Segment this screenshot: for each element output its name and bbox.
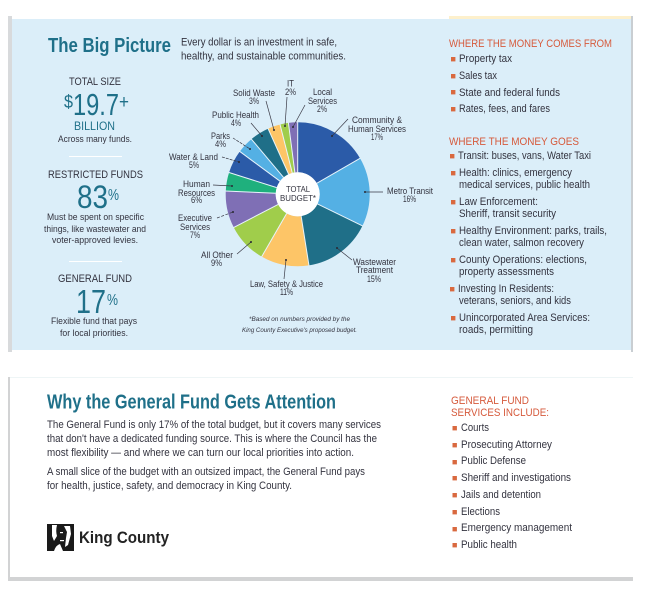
stat: restricted funds: 83 xyxy=(77,179,108,215)
stat: total size xyxy=(58,76,132,145)
panel: the big picture xyxy=(8,16,633,352)
list: where the money goes: Sheriff, transit security xyxy=(459,208,556,220)
list: where the money goes xyxy=(449,136,607,336)
footnote xyxy=(242,316,357,334)
stat: total size: $ xyxy=(64,92,73,112)
pie labels: Services xyxy=(308,96,337,106)
footnote: *Based on numbers provided by the xyxy=(249,316,350,323)
stat: total size: BILLION xyxy=(74,121,115,133)
stat: general fund: % xyxy=(107,292,118,309)
stat: restricted funds: voter-approved levies. xyxy=(52,235,138,246)
list: general fund services: SERVICES INCLUDE: xyxy=(451,407,549,419)
list: where the money comes from xyxy=(449,38,612,115)
pie labels: Resources xyxy=(178,188,215,198)
stat: general fund: 17 xyxy=(76,283,106,320)
heading: the big picture: The Big Picture xyxy=(48,34,171,57)
pie labels: 2% xyxy=(285,87,296,97)
stat: total size: + xyxy=(119,92,129,113)
pie labels: IT xyxy=(287,78,295,88)
list: where the money goes: property assessments xyxy=(459,266,554,278)
pie labels: 2% xyxy=(317,104,327,114)
list: where the money goes: Unincorporated Area Services: xyxy=(459,312,590,324)
pie chart: total budget xyxy=(225,122,364,266)
pie labels: 7% xyxy=(190,230,200,240)
list: where the money goes: County Operations: elections, xyxy=(459,254,587,266)
pie labels: 4% xyxy=(231,118,241,128)
pie labels: Parks xyxy=(211,131,230,141)
list: where the money comes from: Sales tax xyxy=(459,70,497,82)
list: where the money goes: Law Enforcement: xyxy=(459,196,538,208)
body text: most flexibility — and where we can turn our local priorities into action. xyxy=(47,447,354,459)
pie labels: Water & Land xyxy=(169,152,218,162)
pie centre label: TOTAL xyxy=(286,184,310,194)
list: general fund services: Prosecuting Attorney xyxy=(461,439,552,451)
body text: The General Fund is only 17% of the total budget, but it covers many services xyxy=(47,419,381,431)
stat: restricted funds: Must be spent on specific xyxy=(47,212,144,223)
list: where the money goes: Investing In Residents: xyxy=(458,283,554,295)
list: where the money comes from: State and federal funds xyxy=(459,87,560,99)
list: general fund services: Emergency management xyxy=(461,522,572,534)
footnote: King County Executive's proposed budget. xyxy=(242,327,357,334)
panel: general fund xyxy=(8,377,633,581)
list: where the money goes: Health: clinics, emergency xyxy=(459,167,572,179)
stat: general fund: Flexible fund that pays xyxy=(51,316,137,327)
pie labels: Human Services xyxy=(348,124,406,134)
list: general fund services: Courts xyxy=(461,422,489,434)
pie labels: Treatment xyxy=(356,265,393,275)
pie labels xyxy=(169,78,433,297)
stat: restricted funds: RESTRICTED FUNDS xyxy=(48,169,143,181)
stat: total size: 19.7 xyxy=(73,87,119,122)
pie labels: Public Health xyxy=(212,110,259,120)
logo: King County: King County xyxy=(79,529,170,547)
pie labels: 4% xyxy=(215,139,226,149)
list: where the money goes: clean water, salmon recovery xyxy=(459,237,584,249)
pie labels: 11% xyxy=(280,287,293,297)
list: where the money comes from: WHERE THE MONEY COMES FROM xyxy=(449,38,612,50)
list: general fund services: Public Defense xyxy=(461,455,526,467)
list: general fund services: Jails and detention xyxy=(461,489,541,501)
list: where the money goes: roads, permitting xyxy=(459,324,533,336)
stat: restricted funds: % xyxy=(108,187,119,204)
list: general fund services xyxy=(451,395,572,551)
pie leader end dots xyxy=(231,125,366,261)
body text: A small slice of the budget with an outsized impact, the General Fund pays xyxy=(47,466,365,478)
list: general fund services: Public health xyxy=(461,539,517,551)
pie labels: Human xyxy=(183,179,210,189)
list: where the money goes: medical services, public health xyxy=(459,179,590,191)
stat: general fund xyxy=(51,273,137,339)
pie labels: Local xyxy=(313,87,332,97)
pie labels: 6% xyxy=(191,195,202,205)
stat: restricted funds: things, like wastewater and xyxy=(44,224,146,235)
intro text: Every dollar is an investment in safe, xyxy=(181,36,337,48)
list: general fund services: Elections xyxy=(461,506,500,518)
body text: for health, justice, safety, and democracy in King County. xyxy=(47,480,292,492)
pie leader lines xyxy=(213,97,383,279)
pie labels: Solid Waste xyxy=(233,88,275,98)
body text: that don't have a dedicated funding source. This is where the Council has the xyxy=(47,433,377,445)
stat: general fund: GENERAL FUND xyxy=(58,273,132,285)
pie labels: 15% xyxy=(367,274,381,284)
intro text: healthy, and sustainable communities. xyxy=(181,50,346,62)
list: general fund services: Sheriff and investigations xyxy=(461,472,571,484)
pie labels: Community & xyxy=(352,115,402,125)
pie labels: All Other xyxy=(201,250,233,260)
logo: King County xyxy=(47,524,170,551)
heading: why the general fund gets attention: Why the General Fund Gets Attention xyxy=(47,390,336,414)
pie labels: 9% xyxy=(211,258,222,268)
body text xyxy=(47,419,381,492)
pie centre label xyxy=(280,184,317,203)
list: where the money comes from: Rates, fees, and fares xyxy=(459,103,550,115)
list: general fund services: GENERAL FUND xyxy=(451,395,529,407)
pie labels: 17% xyxy=(371,132,383,142)
pie labels: Services xyxy=(180,222,210,232)
list: where the money goes: veterans, seniors, and kids xyxy=(459,295,571,307)
pie labels: 3% xyxy=(249,96,259,106)
pie labels: Wastewater xyxy=(353,257,396,267)
list: where the money goes: Healthy Environment: parks, trails, xyxy=(459,225,607,237)
list: where the money comes from: Property tax xyxy=(459,53,512,65)
pie labels: Law, Safety & Justice xyxy=(250,279,323,289)
list: where the money goes: WHERE THE MONEY GOES xyxy=(449,136,579,148)
intro text xyxy=(181,36,346,62)
pie centre label: BUDGET* xyxy=(280,193,317,203)
pie labels: Executive xyxy=(178,213,212,223)
stat: restricted funds xyxy=(44,169,146,246)
pie labels: 16% xyxy=(403,194,416,204)
pie labels: 5% xyxy=(189,160,199,170)
stat: general fund: for local priorities. xyxy=(60,328,128,339)
list: where the money goes: Transit: buses, vans, Water Taxi xyxy=(458,150,591,162)
pie labels: Metro Transit xyxy=(387,186,433,196)
stat: total size: Across many funds. xyxy=(58,134,132,145)
stat: total size: TOTAL SIZE xyxy=(69,76,121,88)
